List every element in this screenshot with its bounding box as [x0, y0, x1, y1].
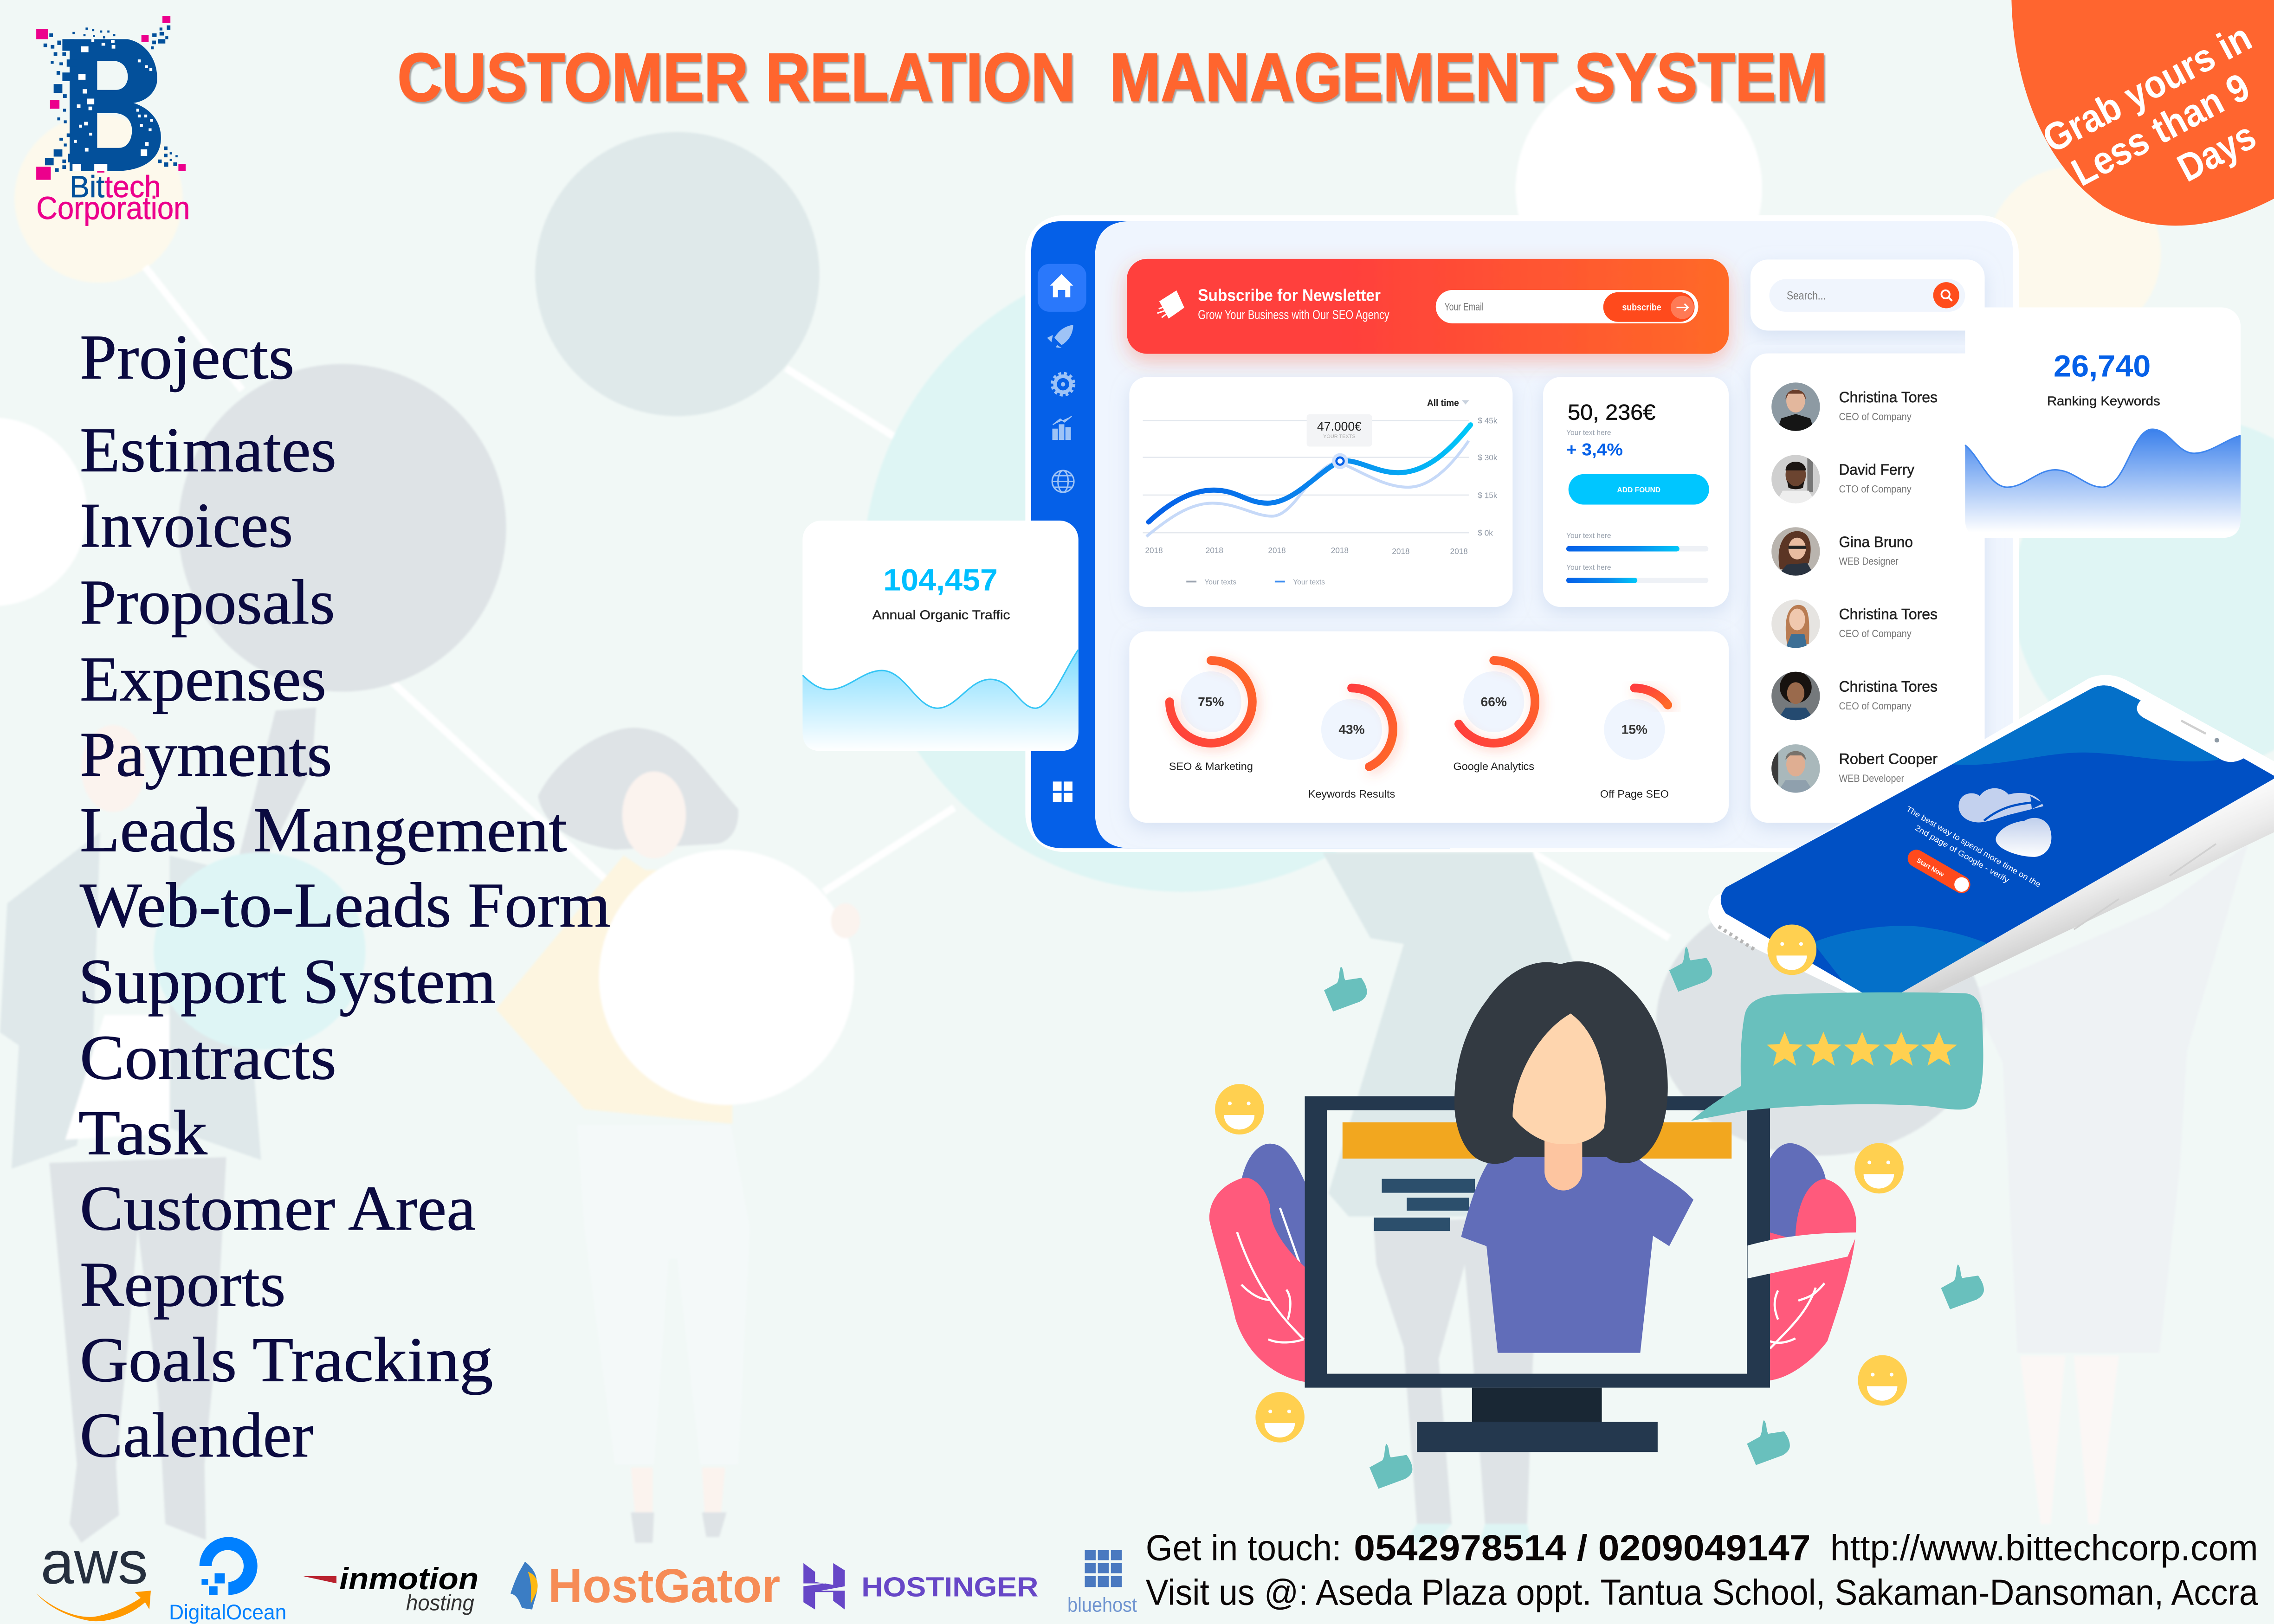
- area chart: keywords: [1965, 429, 2241, 538]
- donut card: [1129, 632, 1729, 823]
- line chart card: 2018: [1450, 547, 1468, 556]
- logo: bluehost: bluehost: [1067, 1593, 1137, 1616]
- stats card: Your text here: [1566, 532, 1611, 540]
- title: CUSTOMER RELATION MANAGEMENT SYSTEM: [397, 39, 1828, 116]
- logo: AWS: aws: [41, 1528, 148, 1596]
- icon: chart: [1053, 416, 1072, 439]
- donut: Keywords Results 43%: 43%: [1338, 722, 1365, 736]
- person: Robert Cooper: Robert Cooper: [1839, 750, 1938, 767]
- smiley 4: [1255, 1392, 1305, 1443]
- person: Christina Tores: Christina Tores: [1839, 606, 1938, 623]
- donut: Keywords Results 43%: [1308, 688, 1395, 800]
- phone port dots: [1718, 927, 1755, 950]
- logo letter B with pixel squares: [70, 39, 161, 171]
- contact details: 0542978514 / 0209049147: [1354, 1527, 1811, 1568]
- phone mockup: [1708, 667, 2274, 1008]
- feature list: [78, 322, 611, 1470]
- line chart card: $ 15k: [1478, 490, 1498, 500]
- smiley 3: [1858, 1355, 1907, 1405]
- person: Robert Cooper: [1771, 744, 1938, 793]
- woman: face: [1512, 1013, 1606, 1144]
- chart legend: Your texts: [1204, 578, 1236, 586]
- person: Christina Tores: CEO of Company: [1839, 628, 1912, 639]
- tooltip: YOUR TEXTS: [1323, 434, 1356, 439]
- person: Christina Tores: Christina Tores: [1839, 388, 1938, 406]
- logo: inmotion hosting: inmotion: [339, 1562, 478, 1596]
- screen header bar: [1343, 1122, 1731, 1159]
- thumb 2: [1669, 947, 1712, 992]
- line chart card: $ 0k: [1478, 528, 1493, 538]
- feature list: Task: [78, 1097, 207, 1168]
- search card: [1751, 259, 1985, 330]
- line chart card: 2018: [1392, 547, 1410, 556]
- thumb 4: [1370, 1444, 1412, 1489]
- floating card: ranking keywords: Ranking Keywords: [2047, 393, 2160, 408]
- corner badge: offer: Days: [2171, 113, 2262, 190]
- person: David Ferry: David Ferry: [1839, 461, 1915, 478]
- logo: inmotion hosting: hosting: [406, 1591, 474, 1615]
- light data line: [1146, 441, 1469, 536]
- logo: DigitalOcean: DigitalOcean: [169, 1600, 286, 1624]
- floating card: ranking keywords: 26,740: [2054, 349, 2151, 383]
- line chart card: [1129, 377, 1512, 607]
- smiley 1: [1215, 1084, 1264, 1134]
- stats card: Your text here: [1566, 429, 1611, 437]
- line chart card: 2018: [1206, 546, 1223, 555]
- icon: globe: [1052, 470, 1074, 492]
- phone body: [1708, 675, 2274, 1000]
- phone text: The best way to spend more time on the: [1905, 804, 2042, 889]
- feature list: Payments: [80, 719, 332, 790]
- search card: Search...: [1787, 289, 1826, 302]
- feature list: Web-to-Leads Form: [80, 870, 611, 941]
- newsletter banner: [1127, 259, 1729, 354]
- rating stars: [1767, 1031, 1957, 1066]
- phone button: Start Now: [1915, 857, 1945, 878]
- main panel: [1095, 221, 2013, 848]
- logo: HostGator: HostGator: [548, 1559, 780, 1612]
- logo: Hostinger: [803, 1563, 1039, 1610]
- phone side buttons: [2074, 844, 2216, 929]
- corner badge: offer: [2011, 0, 2274, 226]
- chart legend: Your texts: [1293, 578, 1325, 586]
- person: Robert Cooper: WEB Developer: [1839, 773, 1904, 784]
- icon: home: [1038, 264, 1086, 312]
- thumb 3: [1941, 1264, 1984, 1309]
- contact details: [1146, 1527, 2258, 1612]
- feature list: Estimates: [80, 414, 336, 485]
- chart legend: [1186, 578, 1325, 586]
- donut: SEO & Marketing 75%: SEO & Marketing: [1169, 760, 1253, 772]
- feature list: Reports: [80, 1249, 286, 1320]
- stats card: ADD FOUND: [1617, 486, 1660, 494]
- floating card: annual organic traffic: 104,457: [883, 563, 998, 597]
- smiley 5: [1767, 924, 1816, 975]
- main data line: [1149, 425, 1471, 522]
- feature list: Proposals: [80, 567, 335, 638]
- icon: grid: [1053, 781, 1072, 802]
- thumb 5: [1747, 1420, 1790, 1465]
- feature list: Calender: [80, 1399, 313, 1470]
- icon: gear: [1052, 374, 1074, 395]
- person: Gina Bruno: WEB Designer: [1839, 555, 1899, 567]
- logo: Hostinger: HOSTINGER: [861, 1572, 1039, 1603]
- feature list: Contracts: [80, 1022, 336, 1093]
- donut: Google Analytics 66%: 66%: [1481, 695, 1507, 709]
- line chart card: All time: [1427, 398, 1459, 408]
- person: Christina Tores: Christina Tores: [1839, 677, 1938, 695]
- person: David Ferry: CTO of Company: [1839, 483, 1912, 495]
- feature list: Customer Area: [80, 1173, 476, 1244]
- icon: phone clouds: [1958, 788, 2051, 857]
- phone speaker and camera: [2181, 721, 2206, 734]
- corner badge: offer: Grab yours in: [2035, 15, 2258, 161]
- screen text bars: [1374, 1179, 1475, 1231]
- feature list: Expenses: [80, 643, 326, 714]
- person: Christina Tores: [1771, 599, 1938, 649]
- logo text: Corporation: Corporation: [36, 190, 190, 226]
- donut: Google Analytics 66%: Google Analytics: [1454, 760, 1534, 772]
- person: Christina Tores: CEO of Company: [1839, 700, 1912, 712]
- donut: Off Page SEO 15%: [1600, 688, 1669, 800]
- line chart card: 2018: [1145, 546, 1163, 555]
- woman: shirt: [1461, 1157, 1693, 1353]
- illustration: woman in monitor with rating: [1209, 924, 1984, 1489]
- newsletter banner: Your Email: [1444, 301, 1484, 313]
- feature list: Projects: [80, 322, 294, 393]
- donut: SEO & Marketing 75%: 75%: [1198, 695, 1224, 709]
- feature list: Invoices: [80, 490, 293, 561]
- woman: neck: [1544, 1138, 1582, 1191]
- phone button: [1905, 846, 1973, 896]
- logo: bluehost: [1067, 1550, 1137, 1616]
- monitor stand: [1472, 1388, 1602, 1422]
- tooltip: [1307, 414, 1372, 446]
- person: Christina Tores: CEO of Company: [1839, 411, 1912, 422]
- monitor base: [1417, 1422, 1658, 1452]
- corner badge: offer: Less than 9: [2065, 64, 2257, 194]
- line chart card: 2018: [1268, 546, 1286, 555]
- area chart: traffic: [802, 650, 1079, 751]
- newsletter banner: Subscribe for Newsletter: [1198, 285, 1381, 304]
- donut: Off Page SEO 15%: Off Page SEO: [1600, 788, 1669, 800]
- donut: Google Analytics 66%: [1454, 660, 1535, 772]
- contact details: Get in touch:: [1146, 1527, 1342, 1568]
- stats card: Your text here: [1566, 564, 1611, 572]
- people list card: [1751, 354, 1985, 823]
- monitor frame: [1305, 1096, 1770, 1388]
- logo: Bittech Corporation: [36, 16, 190, 226]
- logo: inmotion hosting: [303, 1562, 478, 1615]
- person: Gina Bruno: Gina Bruno: [1839, 533, 1913, 550]
- thumb 1: [1324, 967, 1367, 1012]
- donut: Off Page SEO 15%: 15%: [1622, 722, 1647, 736]
- contact details: http://www.bittechcorp.com: [1830, 1527, 2258, 1568]
- feature list: Support System: [78, 946, 496, 1017]
- newsletter banner: Grow Your Business with Our SEO Agency: [1198, 307, 1389, 322]
- person: Gina Bruno: [1771, 527, 1913, 576]
- person: Christina Tores: [1771, 671, 1938, 721]
- feature list: Leads Mangement: [80, 794, 567, 865]
- floating card: annual organic traffic: [802, 521, 1079, 751]
- right leaves: [1769, 1143, 1856, 1380]
- floating card: annual organic traffic: Annual Organic Traffic: [872, 607, 1010, 622]
- logo: DigitalOcean: [169, 1537, 286, 1624]
- stats card: [1543, 377, 1729, 607]
- donut: SEO & Marketing 75%: [1169, 660, 1253, 772]
- phone text: 2nd page of Google - verify: [1913, 823, 2011, 885]
- stats card: + 3,4%: [1566, 439, 1623, 459]
- line chart card: $ 30k: [1478, 453, 1498, 462]
- rating bubble: [1691, 992, 1983, 1121]
- smiley 2: [1854, 1143, 1904, 1193]
- line chart card: 2018: [1331, 546, 1349, 555]
- logo: AWS: [36, 1528, 151, 1621]
- woman: hair: [1454, 961, 1668, 1164]
- line chart card: $ 45k: [1478, 416, 1498, 425]
- phone screen: [1721, 685, 2274, 998]
- icon: mail: [1157, 291, 1183, 317]
- feature list: Goals Tracking: [80, 1324, 493, 1395]
- person: David Ferry: [1771, 454, 1915, 504]
- icon: rocket: [1047, 325, 1073, 348]
- donut: Keywords Results 43%: Keywords Results: [1308, 788, 1395, 800]
- tooltip: 47.000€: [1317, 419, 1362, 433]
- newsletter banner: subscribe: [1622, 303, 1661, 313]
- dashboard mockup: [1025, 215, 2019, 852]
- logo text: Bittech: Bittech: [70, 170, 161, 204]
- left leaves: [1209, 1144, 1305, 1382]
- sidebar: [1031, 221, 1450, 848]
- frame gap: [1748, 1232, 1858, 1278]
- person: Christina Tores: [1771, 382, 1938, 432]
- stats card: 50, 236€: [1568, 400, 1655, 424]
- floating card: ranking keywords: [1965, 307, 2241, 538]
